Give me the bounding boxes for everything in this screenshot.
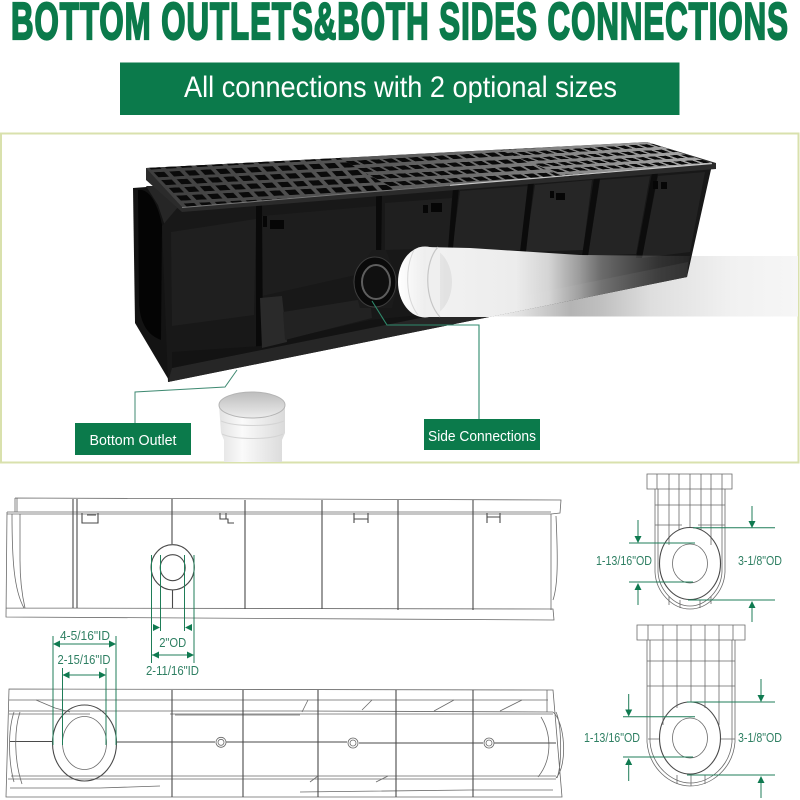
dimension: upper end section	[596, 506, 782, 622]
label: side connections	[424, 419, 540, 450]
drainage channel	[133, 165, 712, 382]
dimension: lower end section	[584, 679, 782, 798]
dimension: bottom outlet 4-5/16"ID and 2-15/16"ID: 4-5/16"ID	[60, 629, 110, 643]
rail clips	[263, 181, 667, 229]
dimension: side port 2"OD and 2-11/16"ID	[146, 555, 199, 678]
grate	[146, 142, 716, 212]
diagram: lower end section	[637, 625, 745, 786]
channel side wall	[162, 165, 712, 382]
recessed wall panels	[171, 219, 256, 326]
diagram: upper end section	[647, 474, 732, 609]
diagram: side elevation	[6, 498, 561, 620]
label: bottom outlet: Bottom Outlet	[90, 433, 176, 449]
dimension: lower end section: 3-1/8"OD	[738, 731, 782, 745]
leader line: side connections	[372, 301, 479, 419]
subtitle banner	[120, 62, 680, 115]
label: side connections: Side Connections	[428, 429, 536, 445]
bottom outlet pipe	[219, 392, 285, 462]
dimension: upper end section: 1-13/16"OD	[596, 554, 652, 568]
panel: product photo	[1, 134, 798, 462]
dimension: lower end section: 1-13/16"OD	[584, 731, 640, 745]
clip details	[82, 513, 500, 523]
dimension: side port 2"OD and 2-11/16"ID: 2-11/16"ID	[146, 664, 199, 678]
dimension: bottom outlet 4-5/16"ID and 2-15/16"ID	[53, 629, 116, 745]
dimension: upper end section: 3-1/8"OD	[738, 554, 782, 568]
leader line: bottom outlet	[135, 370, 237, 423]
diagram: bottom plan view	[6, 689, 564, 797]
dimension: side port 2"OD and 2-11/16"ID: 2"OD	[159, 636, 186, 650]
channel ribs	[256, 204, 263, 351]
drain holes	[216, 737, 494, 748]
dimension: bottom outlet 4-5/16"ID and 2-15/16"ID: 2-15/16"ID	[58, 653, 110, 667]
label: bottom outlet	[75, 423, 191, 455]
fading pipe shadow band	[480, 256, 798, 316]
subtitle banner: All connections with 2 optional sizes	[184, 71, 617, 104]
side port	[352, 250, 398, 308]
channel foot	[168, 262, 688, 382]
side pipe	[398, 246, 690, 318]
channel end face	[133, 186, 185, 382]
side port circles	[151, 545, 194, 590]
